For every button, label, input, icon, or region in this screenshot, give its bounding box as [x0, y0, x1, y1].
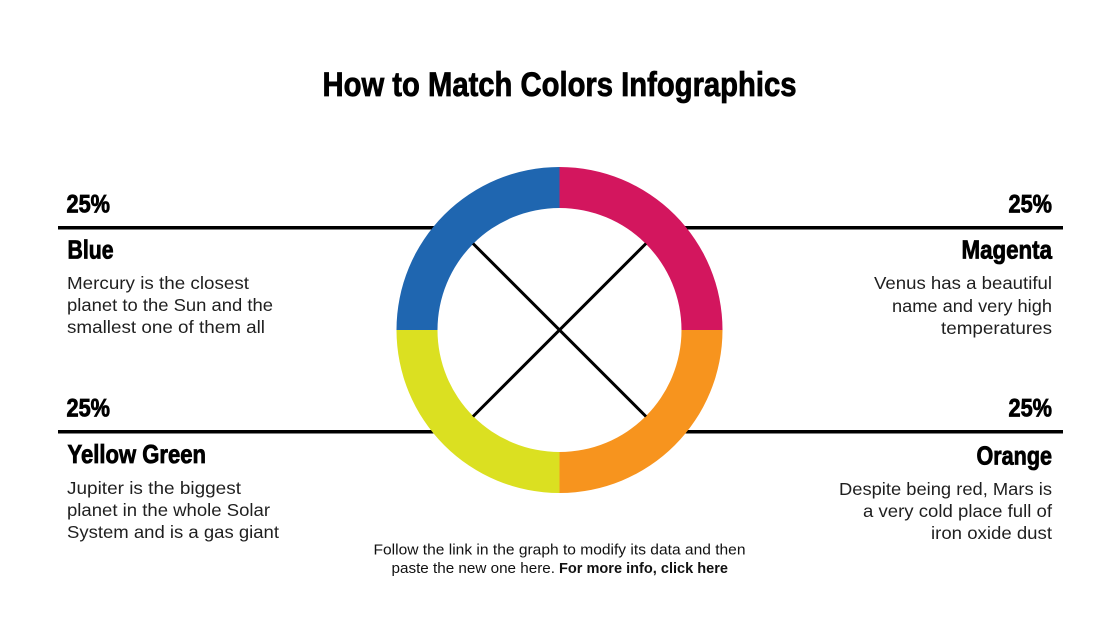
blue description: planet to the Sun and the [67, 295, 273, 315]
footnote: For more info, click here [559, 561, 728, 577]
segment: blue [396, 167, 560, 330]
magenta description: temperatures [941, 318, 1052, 338]
segment: orange [560, 330, 722, 493]
yellow green description: System and is a gas giant [67, 522, 279, 542]
orange heading: Orange [976, 440, 1052, 470]
yellow green description: Jupiter is the biggest [67, 478, 241, 498]
orange description: iron oxide dust [931, 523, 1052, 543]
magenta heading: Magenta [962, 234, 1052, 264]
blue heading: Blue [68, 234, 114, 264]
magenta percentage: 25% [1008, 190, 1052, 218]
title: How to Match Colors Infographics [322, 66, 796, 104]
center cross [473, 244, 646, 416]
yellow green percentage: 25% [66, 394, 110, 422]
panel: orange [839, 394, 1052, 543]
donut chart [396, 167, 722, 493]
yellow green heading: Yellow Green [68, 439, 206, 469]
panel: magenta [874, 190, 1052, 338]
blue description: Mercury is the closest [67, 273, 249, 293]
yellow green description: planet in the whole Solar [67, 500, 270, 520]
segment: magenta [560, 167, 722, 330]
segment: yellow green [396, 330, 560, 493]
divider lines [58, 226, 1063, 434]
blue percentage: 25% [66, 190, 110, 218]
panel: blue [66, 190, 273, 337]
orange description: Despite being red, Mars is [839, 479, 1052, 499]
magenta description: name and very high [892, 296, 1052, 316]
magenta description: Venus has a beautiful [874, 273, 1052, 293]
footnote: paste the new one here. [392, 561, 555, 577]
panel: yellow green [66, 394, 279, 542]
blue description: smallest one of them all [67, 317, 265, 337]
footnote: Follow the link in the graph to modify its data and then [374, 542, 746, 558]
orange percentage: 25% [1008, 394, 1052, 422]
orange description: a very cold place full of [863, 501, 1052, 521]
